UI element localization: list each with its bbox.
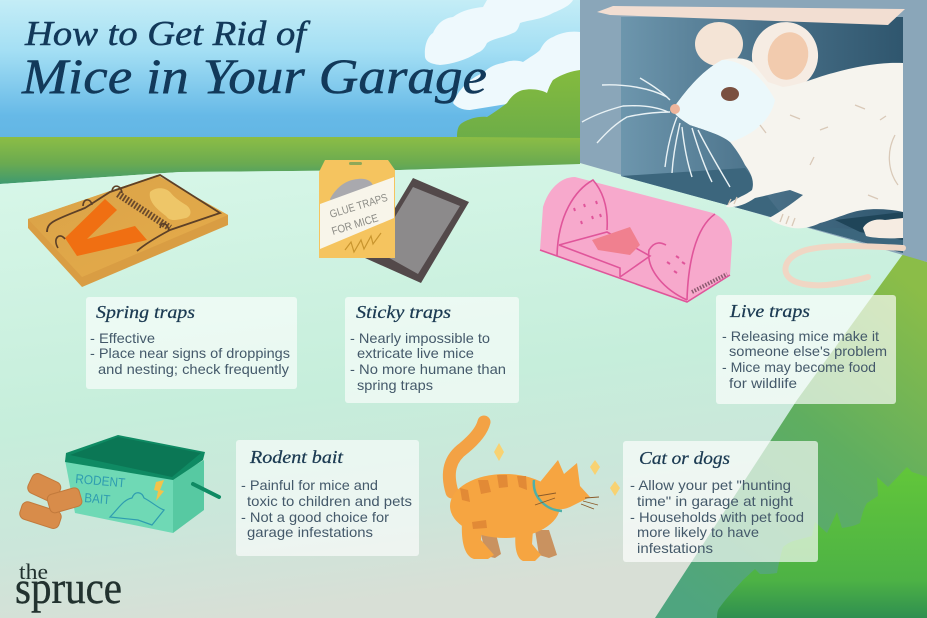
list: for wildlife xyxy=(729,375,797,391)
cat far legs xyxy=(480,530,557,558)
mouse whiskers xyxy=(582,78,730,187)
glue card zigzag xyxy=(345,233,381,252)
heading: Sticky traps xyxy=(356,302,451,322)
card xyxy=(716,295,896,404)
bait box label 2: BAIT xyxy=(84,490,111,507)
garage shelf xyxy=(597,6,905,25)
list: - Households with pet food xyxy=(630,509,804,525)
background: driveway ground xyxy=(0,164,927,618)
title xyxy=(21,14,487,104)
card xyxy=(86,297,297,389)
illustration: spring trap xyxy=(28,175,228,287)
bait pellets xyxy=(18,472,83,530)
cat sparkles xyxy=(494,443,620,496)
garage xyxy=(580,0,927,262)
mouse nose xyxy=(670,104,680,114)
list: garage infestations xyxy=(247,524,373,540)
mouse body xyxy=(672,58,903,228)
trap spring xyxy=(118,194,170,228)
list xyxy=(241,477,412,540)
garage floor shadow xyxy=(621,168,903,253)
bait box lid xyxy=(65,435,205,480)
mouse left ear xyxy=(695,22,743,66)
background: distant bush xyxy=(457,70,580,168)
bait box lightning xyxy=(154,480,164,501)
title line 1: How to Get Rid of xyxy=(24,14,311,53)
list: more likely to have xyxy=(637,524,759,540)
glue card xyxy=(319,160,395,258)
list: - Allow your pet "hunting xyxy=(630,477,791,493)
list: - Effective xyxy=(90,330,155,346)
background: sky xyxy=(0,0,927,145)
live trap holes xyxy=(574,201,685,273)
glue card hanger slot xyxy=(349,162,362,165)
trap top xyxy=(28,175,228,277)
cat head xyxy=(536,460,590,509)
mouse eye xyxy=(721,87,739,101)
cat stripes xyxy=(460,475,527,529)
list: - Releasing mice make it xyxy=(722,328,879,344)
trap orange bar xyxy=(65,199,147,256)
background: foreground bushes xyxy=(717,467,927,618)
panel: rodent bait xyxy=(236,440,419,556)
bait box side xyxy=(173,460,204,533)
card xyxy=(623,441,818,562)
glue mouse xyxy=(330,179,373,203)
illustration: cat xyxy=(449,422,620,561)
bait box label: RODENT xyxy=(75,471,126,490)
heading: Cat or dogs xyxy=(639,448,730,468)
bait box stick xyxy=(193,484,219,497)
trap bait pad xyxy=(150,188,190,220)
panel: live traps xyxy=(716,295,896,404)
cat collar xyxy=(534,480,562,511)
list: someone else's problem xyxy=(729,343,887,359)
list xyxy=(722,328,887,391)
background: clouds xyxy=(425,0,580,110)
list: toxic to children and pets xyxy=(247,493,412,509)
cat tail xyxy=(449,422,484,492)
card xyxy=(236,440,419,556)
panel: sticky traps xyxy=(345,297,519,403)
garage interior xyxy=(621,17,903,253)
live trap lines xyxy=(540,180,730,302)
background: right lawn xyxy=(655,254,927,618)
glue sheet surface xyxy=(375,187,460,274)
glue sheet xyxy=(365,178,469,283)
list: - Mice may become food xyxy=(722,359,876,375)
list: extricate live mice xyxy=(357,345,474,361)
panel: cat or dogs xyxy=(623,441,818,562)
glue card label text: GLUE TRAPS xyxy=(328,192,389,221)
mouse tail xyxy=(785,246,903,285)
glue card label band xyxy=(320,177,394,249)
heading: Rodent bait xyxy=(249,447,344,467)
logo: the spruce: spruce xyxy=(15,562,122,613)
mouse face highlight xyxy=(672,60,775,142)
list: spring traps xyxy=(357,377,433,393)
live trap shell xyxy=(540,177,732,302)
list: infestations xyxy=(637,540,713,556)
list: and nesting; check frequently xyxy=(98,361,289,377)
mouse xyxy=(582,15,903,285)
illustration: live trap xyxy=(540,177,732,302)
trap staples xyxy=(56,186,169,248)
illustration: sticky trap xyxy=(319,160,469,283)
mouse dark belly band xyxy=(835,212,903,240)
trap wire xyxy=(47,175,220,251)
list xyxy=(630,477,804,556)
heading: Live traps xyxy=(729,301,810,321)
cat body xyxy=(450,474,560,538)
bait box mouse xyxy=(110,493,164,525)
mouse back foot xyxy=(863,218,903,238)
bait box front xyxy=(65,460,173,533)
card xyxy=(345,297,519,403)
glue card label text 2: FOR MICE xyxy=(330,212,380,238)
list: - Not a good choice for xyxy=(241,509,389,525)
live trap grill xyxy=(692,274,727,292)
live trap cheese xyxy=(592,227,640,255)
list: time" in garage at night xyxy=(637,493,793,509)
list: - Nearly impossible to xyxy=(350,330,490,346)
list: - No more humane than xyxy=(350,361,506,377)
list: - Place near signs of droppings xyxy=(90,345,290,361)
list xyxy=(90,330,290,377)
background: grass strip xyxy=(0,137,580,184)
mouse right ear xyxy=(744,15,826,97)
panel: spring traps xyxy=(86,297,297,389)
heading: Spring traps xyxy=(96,302,195,322)
title line 2: Mice in Your Garage xyxy=(21,48,487,104)
cat near legs xyxy=(462,522,541,561)
garage frame xyxy=(580,0,927,262)
cat whiskers xyxy=(535,493,599,509)
trap board xyxy=(28,175,228,287)
logo: the spruce: the xyxy=(19,559,48,584)
list xyxy=(350,330,506,393)
mouse fur marks xyxy=(728,105,898,226)
list: - Painful for mice and xyxy=(241,477,378,493)
bait box lid top xyxy=(70,437,201,477)
illustration: rodent bait box xyxy=(18,435,219,533)
